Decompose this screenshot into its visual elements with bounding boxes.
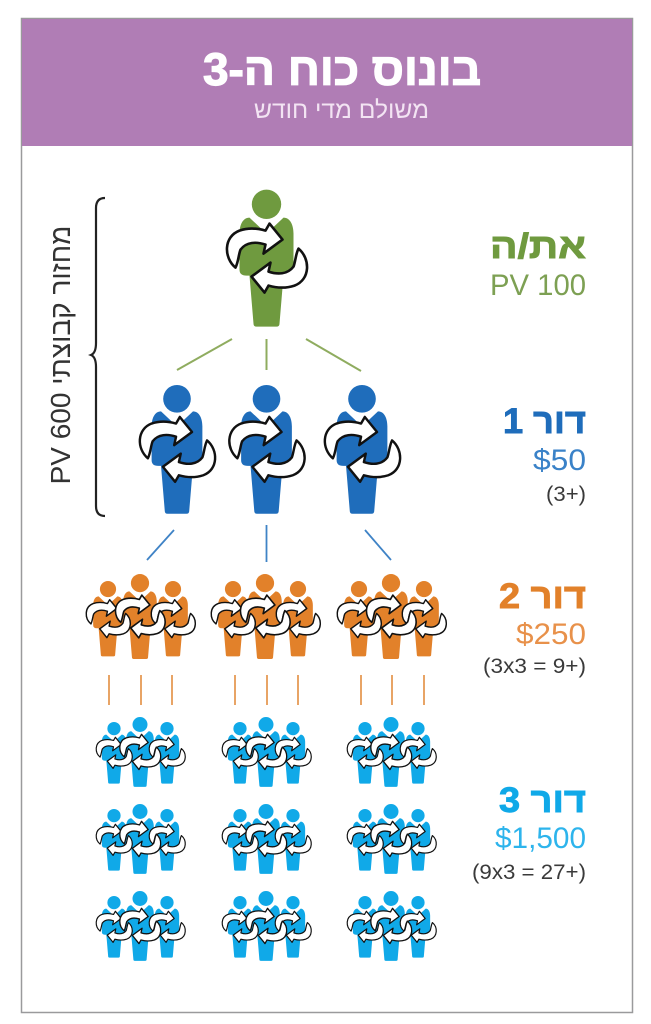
label: you: את/ה	[490, 227, 586, 266]
subtitle: משולם מדי חודש	[254, 97, 429, 124]
label: generation 2	[483, 577, 586, 678]
label: generation 1: (3+)	[546, 483, 586, 506]
icon: green person (you)	[227, 190, 307, 327]
label: generation 2: דור 2	[499, 577, 586, 616]
label: you	[490, 227, 586, 302]
label: generation 3: דור 3	[499, 781, 586, 820]
label: generation 1: דור 1	[503, 402, 586, 441]
connectors: you to generation 1	[177, 339, 361, 371]
brace: group span	[91, 198, 105, 516]
label: generation 2: $250	[516, 618, 586, 651]
panel: header band	[22, 19, 632, 146]
connectors: generation 1 to generation 2	[147, 525, 391, 562]
label: generation 1	[503, 402, 586, 506]
icons: generation 2 orange teams	[86, 574, 446, 659]
icons: generation 1 blue people	[140, 385, 400, 514]
label: generation 1: $50	[533, 444, 586, 477]
icons: generation 3 cyan teams	[96, 717, 436, 961]
label: generation 3	[472, 781, 586, 884]
label: you: PV 100	[490, 269, 586, 302]
connectors: generation 2 to generation 3	[109, 675, 424, 705]
label: generation 3: (9x3 = 27+)	[472, 861, 586, 884]
label: group volume: מחזור קבוצתי PV 600	[45, 226, 76, 484]
title: בונוס כוח ה-3	[203, 44, 481, 95]
label: generation 2: (3x3 = 9+)	[483, 655, 586, 678]
label: generation 3: $1,500	[495, 822, 586, 855]
